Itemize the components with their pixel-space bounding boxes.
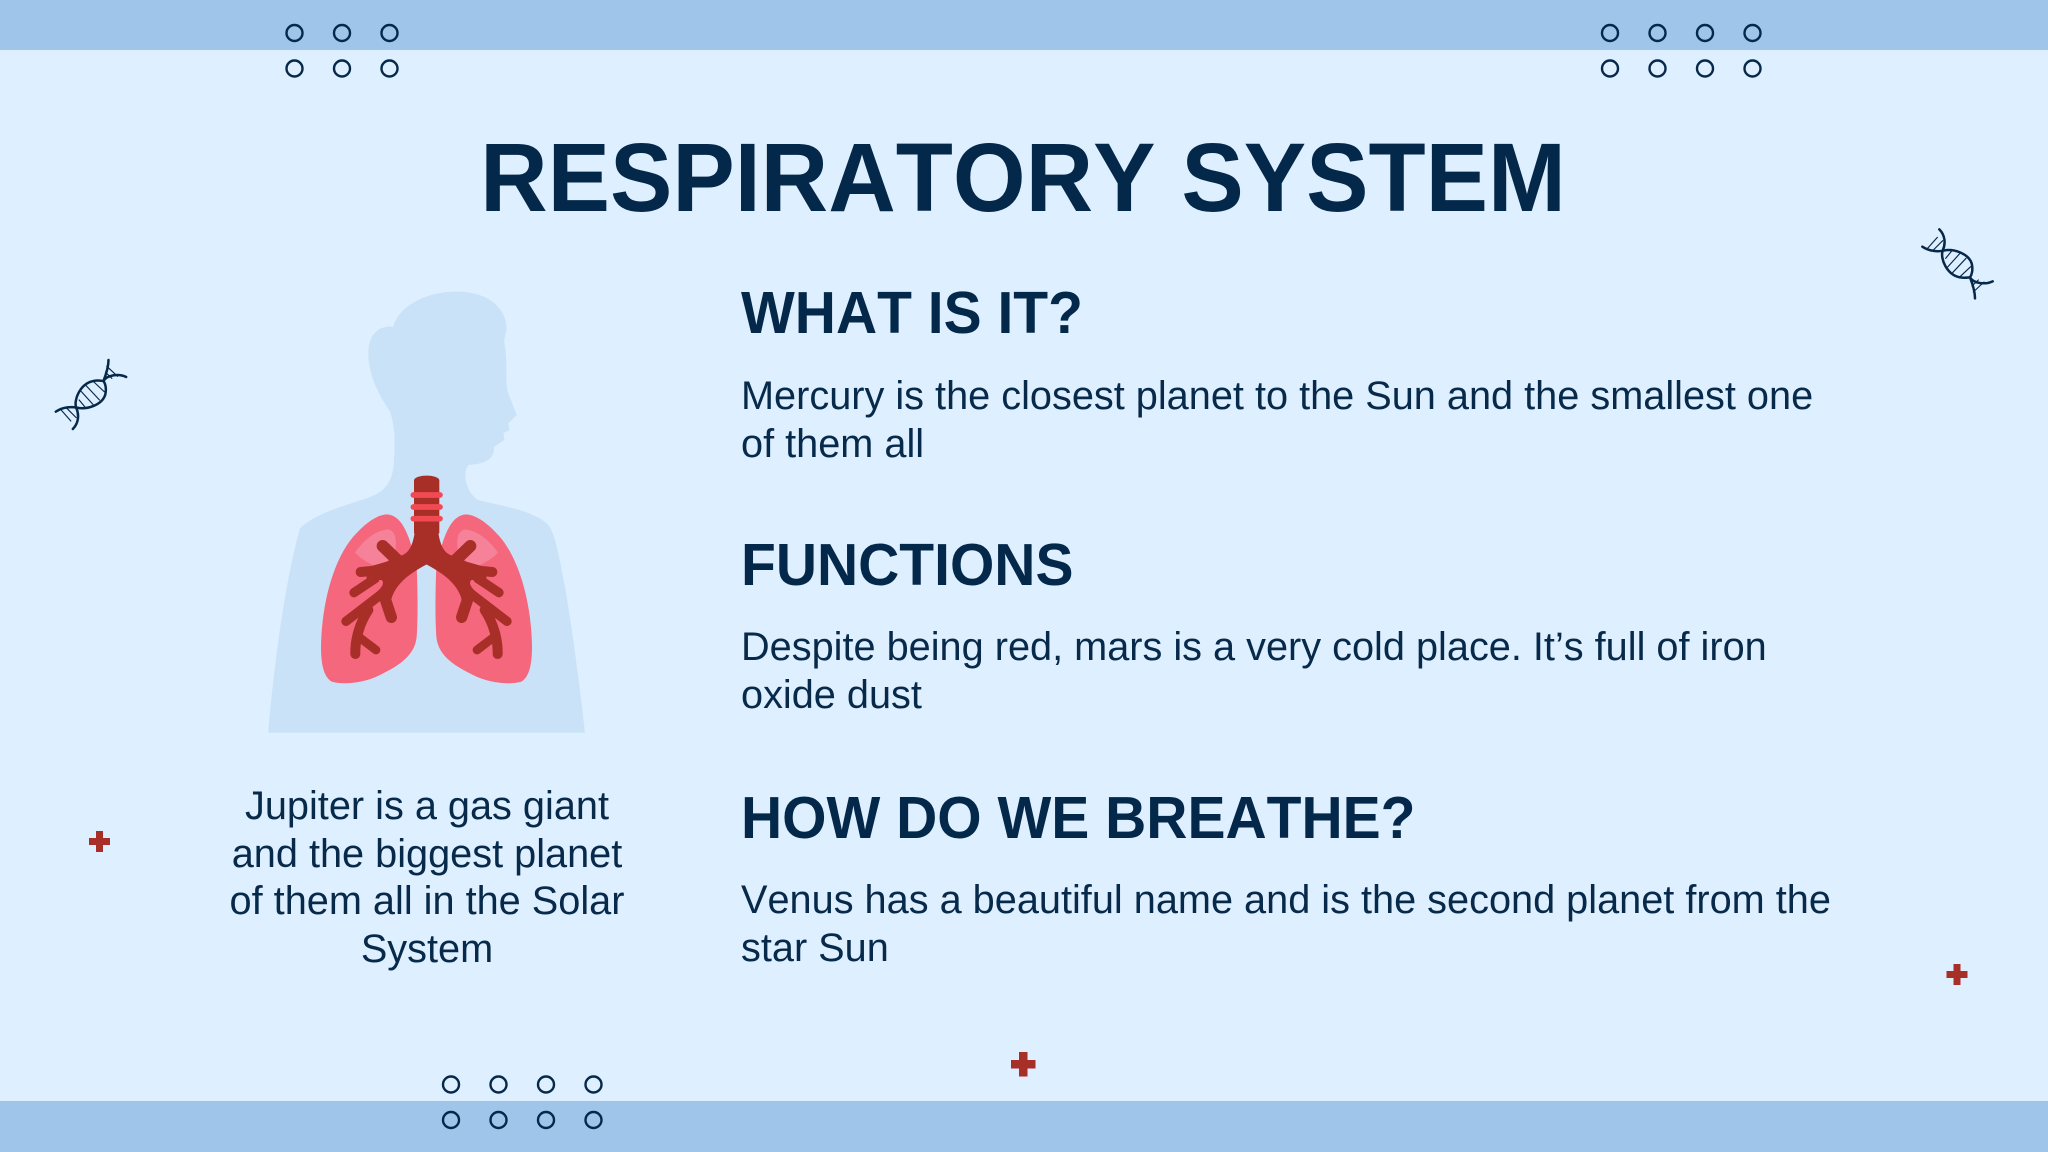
body: Venus has a beautiful name and is the second planet from the — [741, 878, 1831, 922]
title: RESPIRATORY SYSTEM — [480, 122, 1566, 231]
right lung — [426, 514, 532, 683]
section: what is it — [741, 280, 1813, 466]
cross right — [1946, 964, 1968, 985]
body — [741, 878, 1831, 970]
caption: Jupiter is a gas giant — [245, 784, 609, 828]
dna left — [56, 360, 126, 429]
bottom band — [0, 1101, 2048, 1152]
caption: and the biggest planet — [232, 832, 622, 876]
body: Despite being red, mars is a very cold place. It’s full of iron — [741, 625, 1767, 669]
heading: WHAT IS IT? — [741, 280, 1083, 347]
top band — [0, 0, 2048, 50]
silhouette — [268, 292, 585, 733]
dots top right — [1602, 25, 1760, 76]
body: star Sun — [741, 926, 889, 970]
caption: of them all in the Solar — [230, 879, 624, 923]
left lung — [321, 514, 427, 683]
body: of them all — [741, 422, 924, 466]
caption — [230, 784, 624, 970]
dots top left — [286, 25, 398, 76]
body: Mercury is the closest planet to the Sun and the smallest one — [741, 374, 1813, 418]
heading: FUNCTIONS — [741, 532, 1073, 598]
dots bottom — [443, 1076, 602, 1128]
trachea — [413, 476, 440, 533]
body — [741, 625, 1767, 717]
heading: HOW DO WE BREATHE? — [741, 785, 1415, 852]
lungs — [321, 476, 532, 683]
body — [741, 374, 1813, 466]
body: oxide dust — [741, 673, 922, 717]
dna right — [1922, 229, 1993, 298]
cross left — [89, 831, 110, 852]
caption: System — [361, 926, 493, 970]
section: functions — [741, 532, 1767, 717]
cross bottom — [1011, 1052, 1036, 1076]
section: how do we breathe — [741, 785, 1831, 970]
